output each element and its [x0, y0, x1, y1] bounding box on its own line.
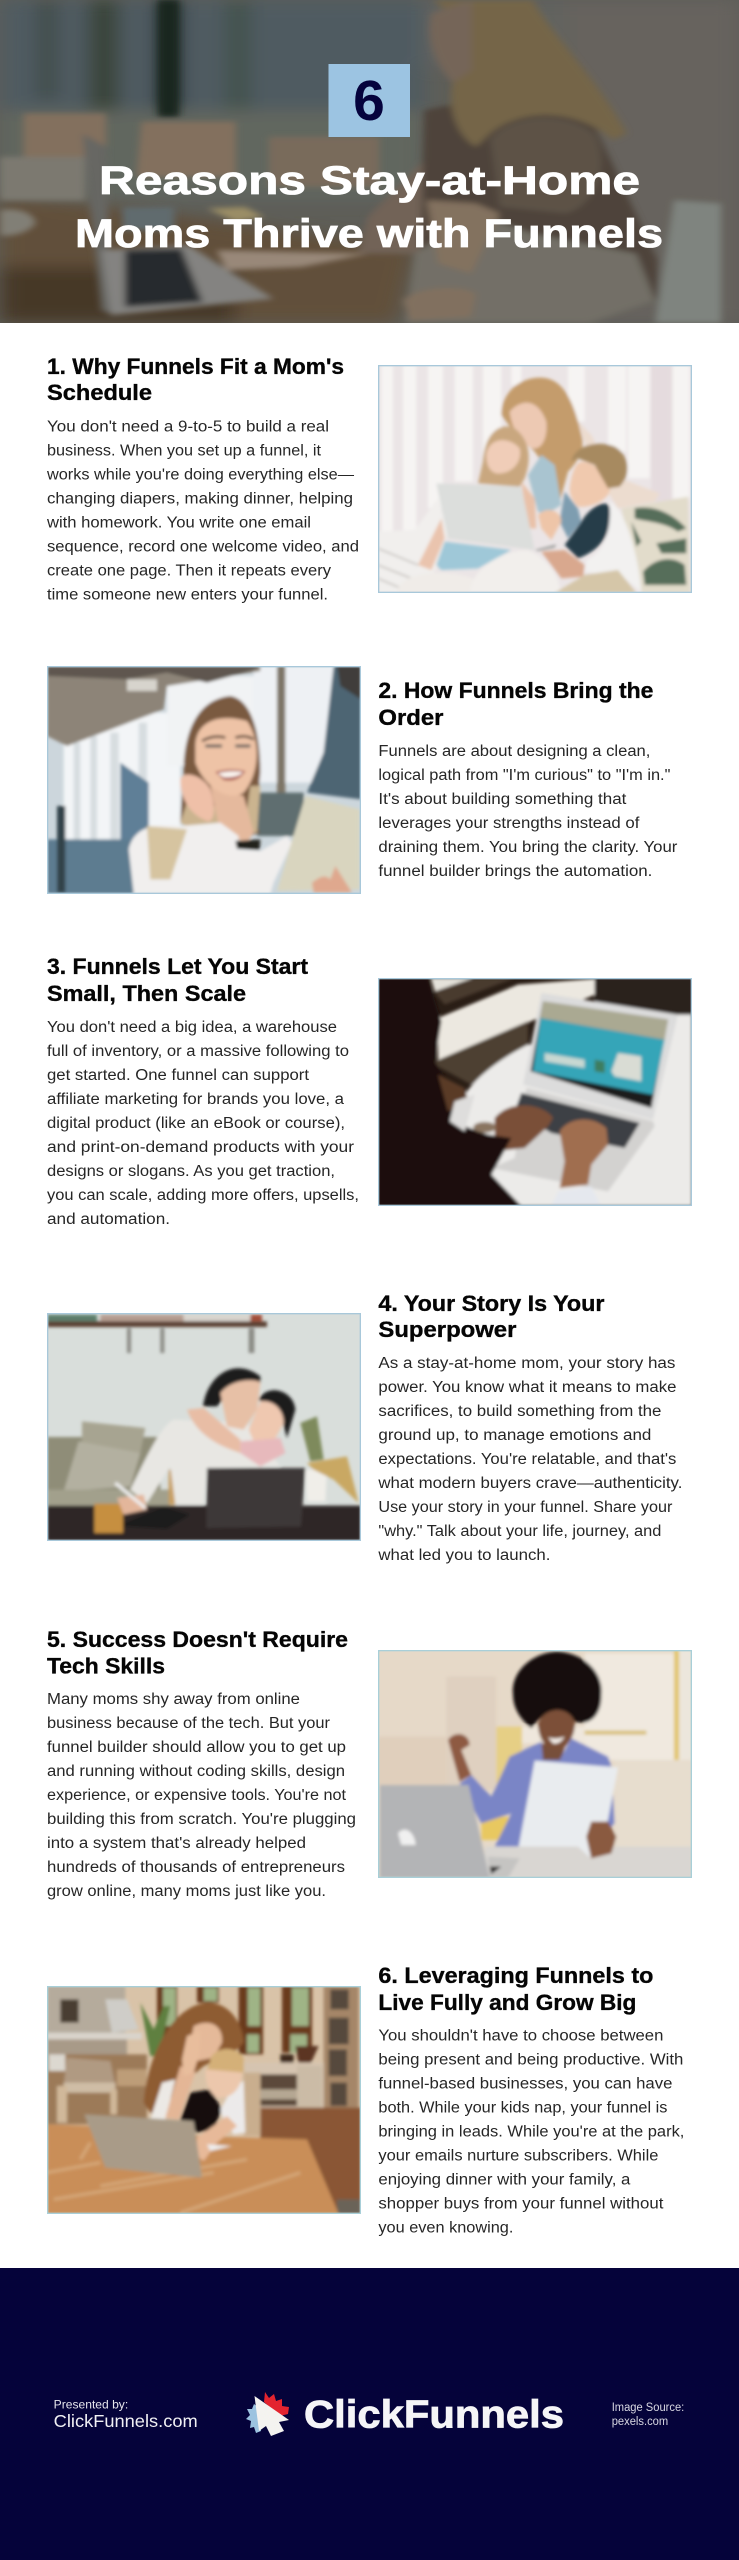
body text: sequence, record one welcome video, and	[47, 539, 359, 556]
heading	[378, 678, 653, 730]
body text: grow online, many moms just like you.	[47, 1883, 326, 1900]
panel: reason 6	[47, 1963, 684, 2236]
body text	[47, 1691, 356, 1900]
body text: your emails nurture subscribers. While	[378, 2148, 658, 2164]
photo: mother and two children with laptop	[378, 365, 692, 593]
body text: funnel builder should allow you to get up	[47, 1739, 346, 1756]
title	[75, 159, 663, 256]
body text	[378, 2028, 684, 2236]
body text: building this from scratch. You're plugging	[47, 1811, 356, 1828]
heading	[47, 354, 344, 405]
body text: affiliate marketing for brands you love, a	[47, 1091, 344, 1108]
photo: tired mother with baby at laptop	[47, 1986, 361, 2214]
presented by: Presented by:	[54, 2398, 128, 2412]
body text: and print-on-demand products with your	[47, 1139, 354, 1156]
body text: time someone new enters your funnel.	[47, 587, 328, 604]
body text: expectations. You're relatable, and that's	[378, 1451, 677, 1468]
panel: reason 1	[46, 354, 692, 604]
body text: draining them. You bring the clarity. Your	[378, 839, 677, 856]
body text: logical path from "I'm curious" to "I'm in."	[378, 767, 670, 784]
heading: Tech Skills	[47, 1654, 165, 1679]
panel: reason 2	[47, 666, 677, 894]
body text: It's about building something that	[378, 791, 627, 808]
body text: what led you to launch.	[377, 1547, 550, 1564]
body text: Many moms shy away from online	[47, 1691, 300, 1708]
body text: hundreds of thousands of entrepreneurs	[47, 1859, 345, 1876]
body text: you can scale, adding more offers, upsells,	[47, 1187, 359, 1204]
heading: Order	[378, 705, 444, 730]
body text: shopper buys from your funnel without	[378, 2196, 664, 2212]
body text: funnel-based businesses, you can have	[378, 2076, 672, 2092]
panel: reason 3	[47, 954, 692, 1228]
heading: 6. Leveraging Funnels to	[378, 1963, 653, 1988]
heading: 4. Your Story Is Your	[378, 1291, 605, 1316]
header photo: mother with child at laptop	[0, 0, 739, 323]
heading: Superpower	[378, 1317, 517, 1342]
number badge: 6	[353, 69, 385, 133]
title: Moms Thrive with Funnels	[75, 212, 663, 256]
header banner	[0, 0, 739, 323]
body text: You shouldn't have to choose between	[378, 2028, 663, 2044]
heading: 3. Funnels Let You Start	[47, 954, 309, 979]
photo: joyful woman reading paper at laptop	[378, 1650, 692, 1878]
body text: Funnels are about designing a clean,	[378, 743, 650, 760]
body text: and running without coding skills, design	[47, 1763, 345, 1780]
body text: full of inventory, or a massive following to	[47, 1043, 349, 1060]
presented by: ClickFunnels.com	[54, 2411, 198, 2431]
icon: ClickFunnels cursor logo	[246, 2392, 289, 2436]
body text	[378, 743, 677, 880]
body text: into a system that's already helped	[47, 1835, 306, 1852]
presented by	[54, 2398, 198, 2431]
body text: digital product (like an eBook or course),	[47, 1115, 345, 1132]
heading	[378, 1963, 653, 2015]
body text	[46, 419, 359, 604]
image source: Image Source:	[612, 2402, 684, 2414]
body text: designs or slogans. As you get traction,	[47, 1163, 335, 1180]
logo wordmark: ClickFunnels	[304, 2394, 564, 2437]
body text: sacrifices, to build something from the	[378, 1403, 661, 1420]
body text: being present and being productive. With	[378, 2052, 683, 2068]
title: Reasons Stay-at-Home	[99, 159, 640, 203]
photo: mother hugged by daughter at desk	[47, 1313, 361, 1541]
body text: with homework. You write one email	[46, 515, 311, 532]
body text: enjoying dinner with your family, a	[378, 2172, 631, 2188]
heading: 1. Why Funnels Fit a Mom's	[47, 354, 344, 379]
footer	[0, 2268, 739, 2560]
heading: Live Fully and Grow Big	[378, 1990, 636, 2015]
body text: what modern buyers crave—authenticity.	[377, 1475, 682, 1492]
heading: 2. How Funnels Bring the	[378, 678, 653, 703]
body text: and automation.	[47, 1211, 170, 1228]
body text: Use your story in your funnel. Share your	[378, 1499, 672, 1516]
body text	[377, 1355, 682, 1564]
body text: power. You know what it means to make	[378, 1379, 676, 1396]
photo: smiling woman on phone with tablet	[47, 666, 361, 894]
body text: bringing in leads. While you're at the park,	[378, 2124, 684, 2140]
body text: ground up, to manage emotions and	[378, 1427, 651, 1444]
body text: business because of the tech. But your	[47, 1715, 330, 1732]
body text: leverages your strengths instead of	[378, 815, 640, 832]
image source	[612, 2402, 684, 2428]
heading	[47, 954, 309, 1006]
number badge	[328, 64, 410, 137]
heading: Small, Then Scale	[47, 981, 246, 1006]
body text: works while you're doing everything else—	[46, 467, 355, 484]
heading	[378, 1291, 605, 1342]
image source: pexels.com	[612, 2416, 668, 2428]
body text: get started. One funnel can support	[47, 1067, 310, 1084]
body text: both. While your kids nap, your funnel is	[378, 2100, 668, 2116]
body text: experience, or expensive tools. You're not	[47, 1787, 347, 1804]
body text: business. When you set up a funnel, it	[47, 443, 322, 460]
body text: You don't need a big idea, a warehouse	[47, 1019, 337, 1036]
body text	[47, 1019, 359, 1228]
heading: 5. Success Doesn't Require	[47, 1627, 348, 1652]
body text: changing diapers, making dinner, helping	[47, 491, 353, 508]
panel: reason 5	[47, 1627, 692, 1900]
photo: typing on a laptop	[378, 978, 692, 1206]
body text: funnel builder brings the automation.	[378, 863, 652, 880]
panel: reason 4	[47, 1291, 682, 1564]
body text: You don't need a 9-to-5 to build a real	[47, 419, 329, 436]
body text: "why." Talk about your life, journey, and	[378, 1523, 661, 1540]
heading: Schedule	[47, 380, 152, 405]
body text: As a stay-at-home mom, your story has	[378, 1355, 676, 1372]
body text: you even knowing.	[378, 2220, 513, 2236]
body text: create one page. Then it repeats every	[47, 563, 331, 580]
heading	[47, 1627, 348, 1679]
